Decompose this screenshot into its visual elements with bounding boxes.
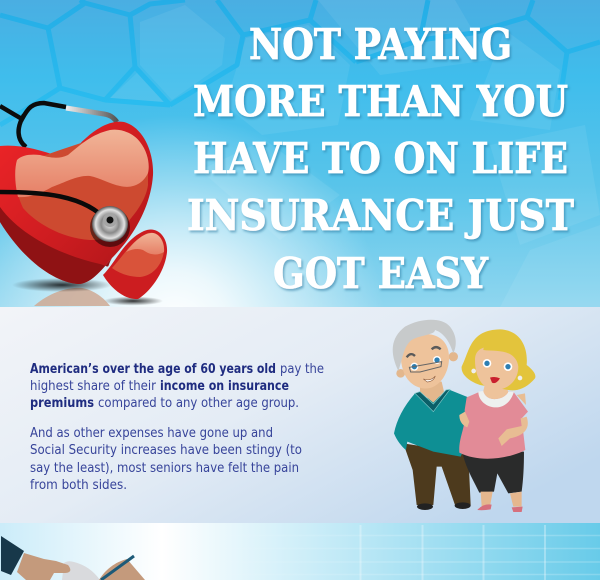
text block: insurance premiums: premiums	[30, 396, 94, 411]
text block: seniors felt the pain: Social Security increases have been stingy (to	[30, 443, 302, 458]
icon: big heart	[0, 122, 153, 284]
title: GOT EASY	[273, 249, 489, 298]
icon: small heart	[103, 229, 167, 306]
panel: bottom section with grid	[0, 523, 600, 580]
woman	[459, 329, 535, 512]
panel: seniors section	[0, 307, 600, 523]
icon: stethoscope earpieces	[0, 103, 117, 147]
text block: seniors felt the pain: And as other expenses have gone up and	[30, 426, 273, 441]
text block: insurance premiums: pay the	[280, 362, 324, 377]
illustration: senior couple	[393, 320, 535, 512]
text block: seniors felt the pain	[30, 426, 302, 493]
text block: insurance premiums: compared to any other age group.	[98, 396, 299, 411]
panel: header	[0, 0, 600, 307]
title	[187, 20, 574, 298]
text block: seniors felt the pain: from both sides.	[30, 478, 127, 493]
illustration: hands signing document	[1, 536, 145, 580]
title: NOT PAYING	[249, 20, 512, 69]
text block: insurance premiums: income on insurance	[160, 379, 289, 394]
icon: stethoscope chest piece and tube	[0, 192, 130, 247]
man	[393, 320, 471, 510]
text block: insurance premiums: American’s over the age of 60 years old	[30, 362, 276, 377]
text block: insurance premiums: highest share of their	[30, 379, 157, 394]
icon: reflection and shadow under heart	[12, 278, 112, 306]
text block: seniors felt the pain: say the least), most seniors have felt the pain	[30, 461, 299, 476]
text block: insurance premiums	[30, 362, 324, 411]
